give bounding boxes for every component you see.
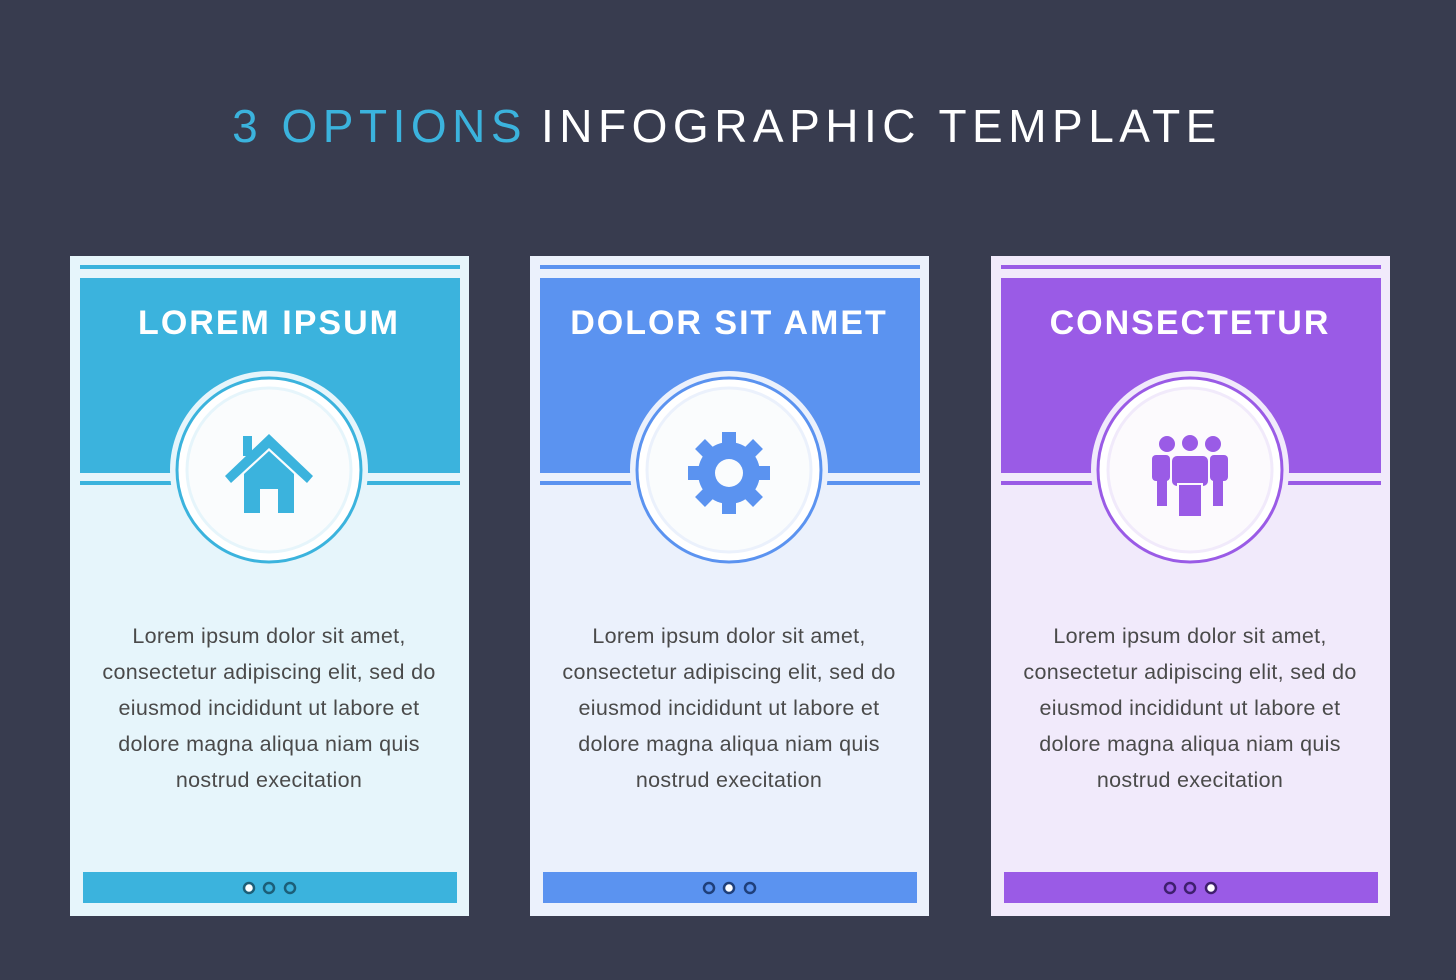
text block: Lorem ipsum dolor sit amet, bbox=[592, 624, 866, 648]
panel: lorem ipsum bbox=[70, 256, 469, 916]
text block: dolore magna aliqua niam quis bbox=[578, 732, 880, 756]
text block: eiusmod incididunt ut labore et bbox=[1040, 696, 1340, 720]
title: 3 OPTIONS INFOGRAPHIC TEMPLATE bbox=[232, 100, 1222, 152]
panel: dolor sit amet bbox=[530, 256, 929, 916]
text block: dolore magna aliqua niam quis bbox=[1039, 732, 1341, 756]
footer bar bbox=[543, 872, 917, 903]
panel: consectetur bbox=[991, 256, 1390, 916]
text block: nostrud execitation bbox=[176, 768, 362, 792]
text block: dolore magna aliqua niam quis bbox=[118, 732, 420, 756]
icon: gear bbox=[671, 415, 787, 531]
text block: consectetur adipiscing elit, sed do bbox=[562, 660, 896, 684]
text block: nostrud execitation bbox=[1097, 768, 1283, 792]
text block: consectetur adipiscing elit, sed do bbox=[102, 660, 436, 684]
text block: nostrud execitation bbox=[636, 768, 822, 792]
text block: eiusmod incididunt ut labore et bbox=[119, 696, 419, 720]
text block: Lorem ipsum dolor sit amet, bbox=[1053, 624, 1327, 648]
icon: people bbox=[1152, 434, 1228, 517]
text block: eiusmod incididunt ut labore et bbox=[579, 696, 879, 720]
text block: consectetur adipiscing elit, sed do bbox=[1023, 660, 1357, 684]
icon: house bbox=[225, 434, 313, 513]
heading: LOREM IPSUM bbox=[138, 304, 400, 342]
heading: DOLOR SIT AMET bbox=[570, 304, 888, 342]
footer bar bbox=[83, 872, 457, 903]
footer bar bbox=[1004, 872, 1378, 903]
text block: Lorem ipsum dolor sit amet, bbox=[132, 624, 406, 648]
heading: CONSECTETUR bbox=[1050, 304, 1330, 342]
